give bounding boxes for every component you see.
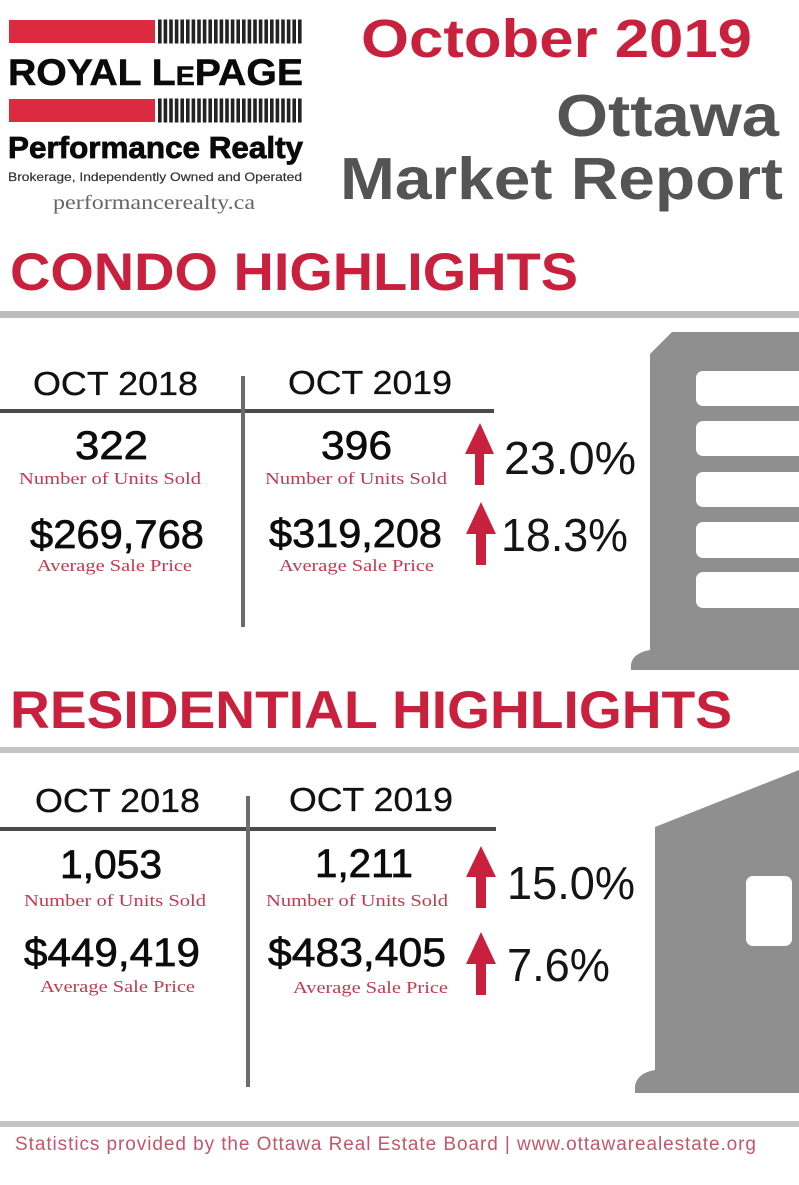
table: condo statistics (0, 364, 636, 627)
heading: Condo Highlights: CONDO HIGHLIGHTS (10, 243, 578, 302)
change: units 15.0%: 15.0% (507, 857, 635, 909)
stat: 2019 average price (268, 931, 448, 997)
stat: 2019 units sold (265, 424, 448, 488)
heading: Residential Highlights: RESIDENTIAL HIGHLIGHTS (10, 681, 732, 740)
column header: Oct 2018: OCT 2018 (35, 782, 200, 819)
arrow up: units (466, 846, 496, 908)
stat: 2019 units sold: 396 (321, 424, 392, 468)
stat: 2019 units sold: Number of Units Sold (266, 891, 449, 910)
title: October 2019: October 2019 (361, 9, 752, 69)
arrow up: price (466, 502, 496, 565)
stat: 2018 units sold (19, 424, 202, 488)
change: units 23.0%: 23.0% (504, 432, 636, 484)
stat: 2018 average price: $449,419 (24, 931, 200, 975)
logo: Royal LePage Performance Realty: ROYAL L EPAGE (8, 52, 303, 93)
table: residential statistics (0, 781, 635, 1087)
stat: 2019 average price: Average Sale Price (279, 556, 434, 575)
stat: 2018 average price (24, 931, 200, 996)
title: Market Report: Market Report (340, 146, 783, 212)
logo: Royal LePage Performance Realty: Brokerage, Independently Owned and Operated (8, 170, 302, 184)
stat: 2018 average price: $269,768 (30, 513, 204, 557)
stat: 2018 units sold: 322 (75, 424, 148, 468)
column header: Oct 2019: OCT 2019 (288, 364, 452, 401)
stat: 2018 units sold: Number of Units Sold (24, 891, 207, 910)
stat: 2019 average price: Average Sale Price (293, 978, 448, 997)
website: performancerealty.ca (53, 192, 255, 214)
stat: 2018 units sold: 1,053 (60, 843, 162, 887)
column header: Oct 2018: OCT 2018 (33, 365, 198, 402)
stat: 2019 average price: $319,208 (269, 512, 442, 556)
title: Ottawa: Ottawa (556, 83, 780, 149)
stat: 2018 average price (30, 513, 204, 575)
logo: Royal LePage Performance Realty: Performance Realty (8, 130, 304, 165)
arrow up: units (465, 423, 494, 485)
stat: 2018 units sold (24, 843, 207, 910)
stat: 2019 average price: $483,405 (268, 931, 446, 975)
change: price 18.3%: 18.3% (501, 509, 628, 561)
arrow up: price (466, 932, 496, 995)
stat: 2018 average price: Average Sale Price (37, 556, 192, 575)
logo: Royal LePage Performance Realty (8, 20, 304, 184)
stat: 2018 average price: Average Sale Price (40, 977, 195, 996)
footer: source: Statistics provided by the Ottawa Real Estate Board | www.ottawarealestate.org (15, 1134, 756, 1155)
icon: house (635, 770, 799, 1093)
stat: 2018 units sold: Number of Units Sold (19, 469, 202, 488)
stat: 2019 units sold: Number of Units Sold (265, 469, 448, 488)
stat: 2019 average price (269, 512, 442, 575)
stat: 2019 units sold (266, 842, 449, 910)
column header: Oct 2019: OCT 2019 (289, 781, 453, 818)
icon: condo building (631, 332, 799, 670)
change: price 7.6%: 7.6% (507, 939, 610, 991)
stat: 2019 units sold: 1,211 (315, 842, 413, 886)
